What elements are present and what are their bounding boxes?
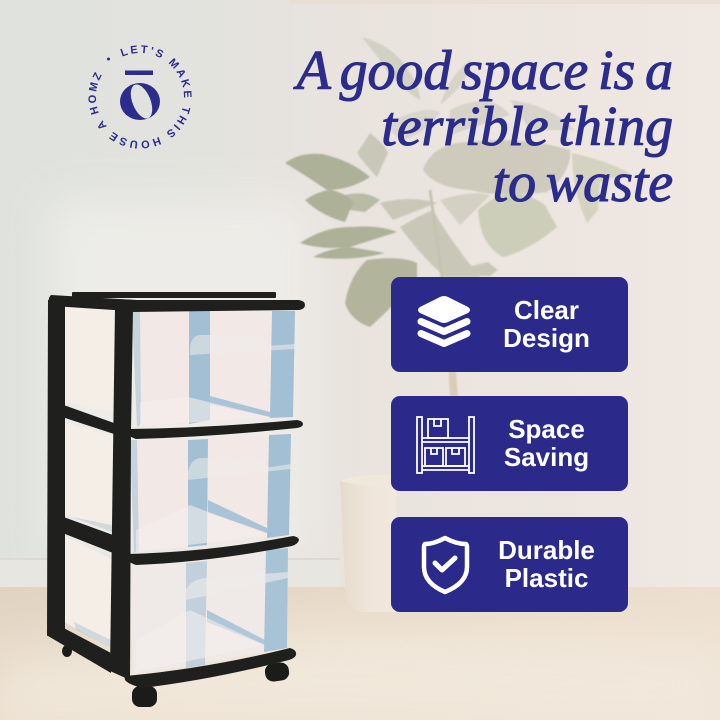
label [503, 295, 590, 352]
logo letter o [120, 81, 160, 122]
black frame [47, 292, 305, 688]
label: Space [508, 414, 585, 444]
label: Design [503, 322, 590, 352]
label [498, 535, 595, 592]
heading [292, 40, 673, 214]
logo dot [107, 58, 110, 60]
card: durable plastic [391, 517, 628, 612]
logo bar [125, 70, 153, 75]
heading: to waste [493, 152, 673, 214]
label: Saving [504, 442, 589, 472]
heading: A good space is a [297, 40, 673, 102]
label: Clear [514, 295, 579, 325]
label: Plastic [505, 562, 588, 592]
middle drawer [130, 434, 291, 553]
bottom drawer [128, 548, 288, 675]
label [504, 414, 589, 472]
card: clear design [391, 277, 628, 372]
card: space saving [391, 396, 628, 491]
icon: storage shelf [416, 416, 475, 474]
heading: terrible thing [381, 96, 673, 158]
label: Durable [498, 535, 595, 565]
icon: shield with check [422, 536, 470, 594]
icon: layers [418, 296, 470, 347]
circular tagline: LET'S MAKE THIS HOUSE A HOMZ [88, 45, 192, 149]
side panels [64, 307, 114, 648]
back and front wheels [62, 645, 290, 707]
top drawer [133, 311, 295, 427]
pot [340, 475, 396, 612]
